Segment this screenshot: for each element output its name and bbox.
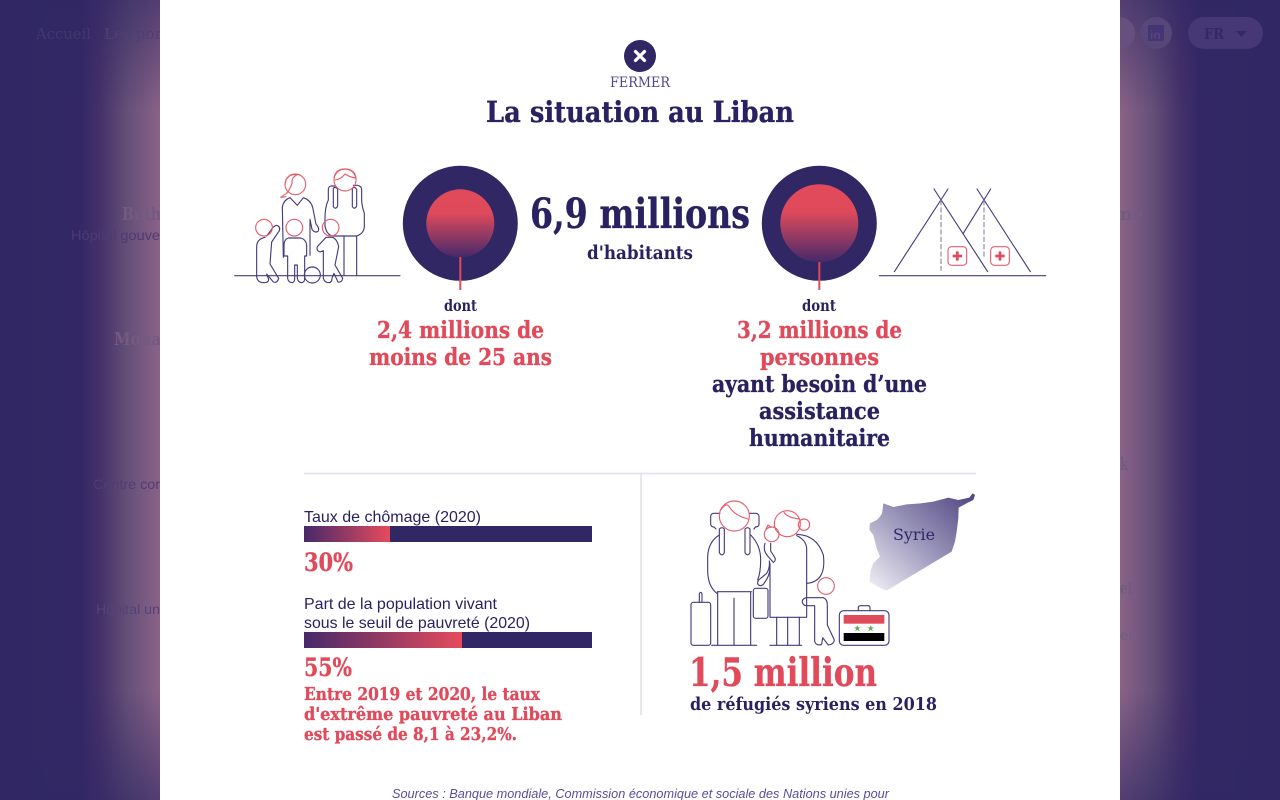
icon: tents illustration <box>879 189 1046 276</box>
bar chart: unemployment: 30% <box>304 548 353 577</box>
stat: humanitarian need <box>712 296 927 452</box>
dimmed page background: et <box>1120 578 1133 599</box>
close label: FERMER <box>610 75 670 91</box>
map: Syria: Syrie <box>893 526 935 544</box>
bar chart: poverty: sous le seuil de pauvreté (2020) <box>304 615 530 632</box>
stat: refugees <box>689 650 937 715</box>
stat: humanitarian need: humanitaire <box>749 425 890 452</box>
donut: humanitarian need <box>762 166 877 290</box>
stat: under 25s <box>369 296 552 371</box>
callout: extreme poverty: Entre 2019 et 2020, le taux <box>304 684 540 705</box>
dimmed page background: Accueil <box>35 25 91 43</box>
bar chart: poverty: Part de la population vivant <box>304 596 498 613</box>
callout: extreme poverty: est passé de 8,1 à 23,2%. <box>304 724 517 745</box>
dimmed page background: Centre cor <box>93 476 160 492</box>
headline figure: d'habitants <box>587 242 693 264</box>
bar chart: poverty: 55% <box>304 653 352 682</box>
dimmed page background: Les por <box>104 25 163 43</box>
headline figure: 6,9 millions <box>530 190 750 238</box>
bar chart: unemployment <box>304 509 592 577</box>
stat: humanitarian need: personnes <box>760 344 879 371</box>
icon: refugees illustration <box>691 501 889 645</box>
modal panel <box>160 0 1120 800</box>
bar chart: poverty <box>304 596 592 682</box>
dimmed page background: el- <box>1120 627 1137 643</box>
callout: extreme poverty <box>304 684 562 745</box>
stat: humanitarian need: assistance <box>759 398 880 425</box>
dimmed page background: Buth <box>122 204 161 225</box>
dimmed page background: FR <box>1204 25 1224 43</box>
stat: refugees: de réfugiés syriens en 2018 <box>690 694 937 715</box>
map: Syria <box>869 493 975 591</box>
stat: under 25s: 2,4 millions de <box>377 317 544 344</box>
dimmed page background: in <box>1150 28 1161 42</box>
dimmed page background: Hôpital gouve <box>71 227 160 243</box>
headline figure <box>530 190 750 264</box>
dimmed page background: ne <box>1120 204 1143 225</box>
icon: close button <box>624 40 656 72</box>
stat: humanitarian need: 3,2 millions de <box>737 317 902 344</box>
stat: under 25s: moins de 25 ans <box>369 344 552 371</box>
stat: humanitarian need: ayant besoin d’une <box>712 371 927 398</box>
donut: under 25s <box>403 166 518 290</box>
title: La situation au Liban <box>486 95 794 129</box>
dimmed page background: Moha <box>114 329 161 350</box>
icon: family illustration <box>235 169 400 283</box>
callout: extreme poverty: d'extrême pauvreté au Liban <box>304 704 562 725</box>
stat: under 25s: dont <box>444 296 478 315</box>
dimmed page background: k <box>1120 454 1128 475</box>
stat: humanitarian need: dont <box>802 296 837 315</box>
stat: refugees: 1,5 million <box>689 650 877 696</box>
dimmed page background: Hôpital un <box>96 601 160 617</box>
bar chart: unemployment: Taux de chômage (2020) <box>304 509 481 526</box>
